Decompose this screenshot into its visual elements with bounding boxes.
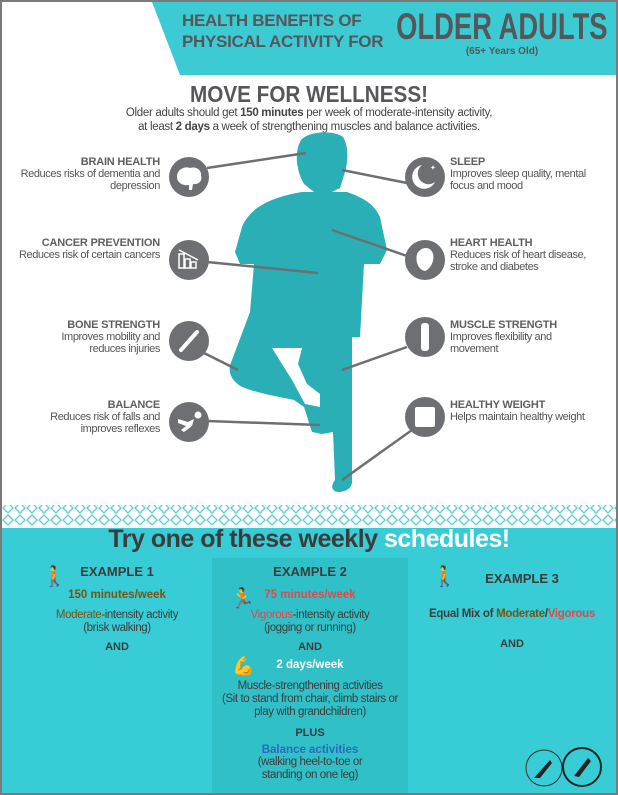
example 2: (walking heel-to-toe or [258,756,362,768]
benefit: healthy weight: HEALTHY WEIGHT [450,399,545,411]
benefit: muscle strength: MUSCLE STRENGTH [450,319,557,331]
benefit: cancer prevention: Reduces risk of certain cancers [19,249,160,261]
benefit: bone strength: Improves mobility and [61,331,160,343]
example 1: 150 minutes/week [68,589,166,601]
benefit: cancer prevention [19,237,160,261]
icon: runner red: 🏃 [230,588,255,610]
header title: PHYSICAL ACTIVITY FOR [182,32,383,51]
benefit: heart health: stroke and diabetes [450,261,538,273]
benefit: balance [50,399,160,435]
example 2: AND [298,641,322,653]
icon: cancer chart [169,240,209,280]
benefit: sleep [450,156,586,192]
icon: sleep: ✦ [430,164,436,172]
example 1: AND [105,641,129,653]
icon: joint [405,317,445,357]
schedules heading: Try one of these weekly schedules! [108,525,510,553]
icon: weight lifter white: 💪 [232,656,254,676]
middle column shade [212,558,408,793]
benefit: sleep: focus and mood [450,180,523,192]
header title: HEALTH BENEFITS OF [182,11,361,30]
example 3: EXAMPLE 3 [485,571,559,586]
benefit: balance: BALANCE [108,399,160,411]
example 2: EXAMPLE 2 [273,564,347,579]
benefit: brain health [21,156,160,192]
intro text: Older adults should get 150 minutes per week of moderate-intensity activity, [126,107,492,119]
benefit: sleep: Improves sleep quality, mental [450,168,586,180]
example 2: 75 minutes/week [264,589,356,601]
example 2: (Sit to stand from chair, climb stairs or [222,693,398,705]
intro text [126,107,492,133]
benefit: brain health: Reduces risks of dementia and [21,168,160,180]
benefit: bone strength [61,319,160,355]
icon: walker brown: 🚶 [42,566,67,588]
figure with connector lines and icons [169,132,445,492]
example 2: Vigorous-intensity activity [251,609,369,621]
icon: sleep [405,157,445,197]
example 1 [42,564,178,653]
schedules panel [2,528,616,793]
heading: move for wellness: MOVE FOR WELLNESS! [190,81,428,107]
example 2: (jogging or running) [264,622,356,634]
icon: fall [169,402,209,442]
example 2: PLUS [295,727,325,739]
benefit: brain health: depression [110,180,160,192]
logos [526,747,602,787]
benefit: heart health: Reduces risk of heart disease, [450,249,586,261]
example 1: (brisk walking) [83,622,151,634]
example 2: standing on one leg) [262,769,358,781]
icon: bone [169,321,209,361]
benefit: balance: Reduces risk of falls and [50,411,160,423]
silhouette [230,132,387,492]
benefit: bone strength: BONE STRENGTH [67,319,160,331]
example 3: AND [500,638,524,650]
icon: brain [169,157,209,197]
example 2: play with grandchildren) [254,706,366,718]
example 2: Balance activities [262,744,358,756]
header title [182,11,384,51]
benefit: cancer prevention: CANCER PREVENTION [42,237,160,249]
example 3: Equal Mix of Moderate/Vigorous [429,608,595,620]
header: older adults: (65+ Years Old) [466,46,538,57]
benefit: brain health: BRAIN HEALTH [81,156,160,168]
benefit: muscle strength: movement [450,343,498,355]
example 2: Muscle-strengthening activities [238,680,382,692]
pattern band [2,502,616,528]
example 1: Moderate-intensity activity [56,609,178,621]
intro text: at least 2 days a week of strengthening muscles and balance activities. [138,121,480,133]
benefit: healthy weight [450,399,585,423]
example 3 [429,565,595,650]
benefit: heart health [450,237,586,273]
benefit: muscle strength: Improves flexibility and [450,331,552,343]
icon: walker brown 3: 🚶 [432,566,457,588]
benefit: sleep: SLEEP [450,156,485,168]
benefit: bone strength: reduces injuries [89,343,160,355]
header band [152,2,616,75]
benefit: healthy weight: Helps maintain healthy weight [450,411,585,423]
header: older adults: OLDER ADULTS [396,6,608,47]
benefit: muscle strength [450,319,557,355]
icon: heart [405,240,445,280]
benefit: heart health: HEART HEALTH [450,237,532,249]
benefit: balance: improves reflexes [81,423,160,435]
example 2: 2 days/week [276,659,344,671]
connector lines [202,153,412,480]
example 2 [222,564,398,781]
icon: scale [405,397,445,437]
example 1: EXAMPLE 1 [80,564,154,579]
